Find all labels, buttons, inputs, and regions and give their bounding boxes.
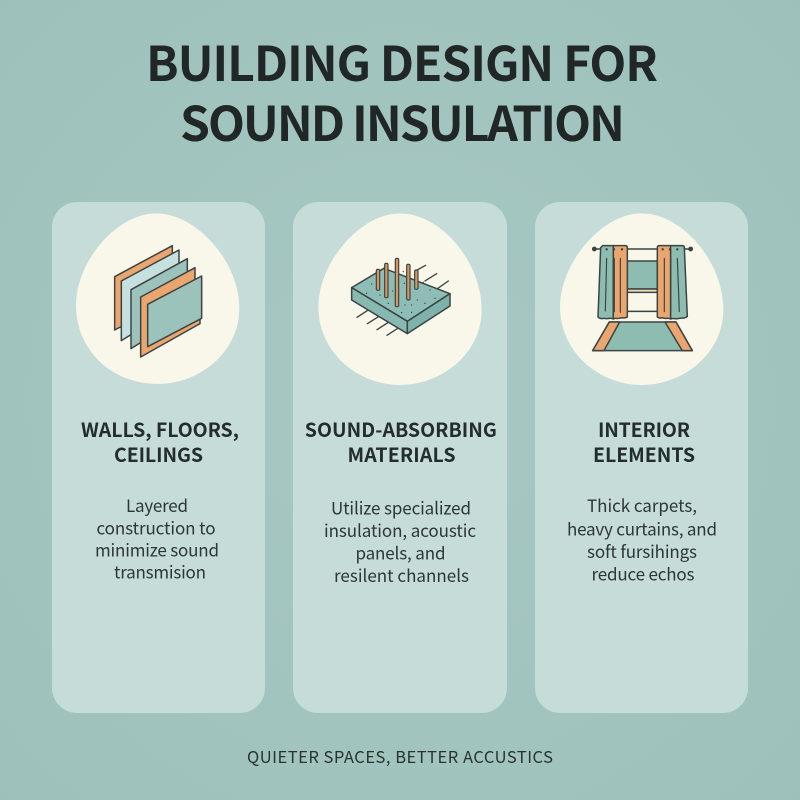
text: walls description: [95, 492, 219, 584]
heading: interior: INTERIOR: [598, 414, 690, 443]
text: sound-absorbing description: resilent channels: [334, 562, 469, 587]
text: sound-absorbing description: Utilize specialized: [331, 494, 471, 520]
heading: interior: ELEMENTS: [593, 439, 695, 468]
panel: walls, floors, ceilings: [52, 202, 265, 713]
text: walls description: minimize sound: [95, 536, 219, 562]
title: SOUND INSULATION: [180, 85, 625, 155]
title: BUILDING DESIGN FOR: [146, 25, 658, 95]
text: interior description: [567, 492, 717, 586]
icon: curtains and carpet: [560, 213, 723, 385]
text: walls description: construction to: [96, 514, 216, 540]
heading: walls: WALLS, FLOORS,: [81, 414, 239, 443]
text: sound-absorbing description: [324, 494, 476, 587]
heading: walls: [81, 414, 239, 468]
text: walls description: transmision: [114, 558, 206, 584]
footer tagline: QUIETER SPACES, BETTER ACCUSTICS: [247, 744, 553, 768]
text: sound-absorbing description: panels, and: [356, 540, 446, 564]
heading: sound-absorbing: [305, 414, 497, 468]
text: interior description: reduce echos: [592, 560, 695, 586]
icon: layered wall sheets: [76, 213, 239, 384]
heading: sound-absorbing: MATERIALS: [348, 439, 456, 468]
text: interior description: soft fursihings: [587, 538, 697, 563]
heading: walls: CEILINGS: [114, 439, 203, 468]
text: interior description: heavy curtains, and: [567, 516, 717, 540]
heading: sound-absorbing: SOUND-ABSORBING: [305, 414, 497, 443]
icon: insulation block with channels: [318, 213, 482, 385]
heading: interior: [593, 414, 695, 468]
text: walls description: Layered: [126, 492, 188, 517]
panel: interior elements: [535, 202, 748, 713]
text: interior description: Thick carpets,: [587, 492, 697, 517]
text: sound-absorbing description: insulation, acoustic: [324, 517, 476, 542]
panel: sound-absorbing materials: [293, 202, 507, 713]
title: [146, 25, 658, 155]
